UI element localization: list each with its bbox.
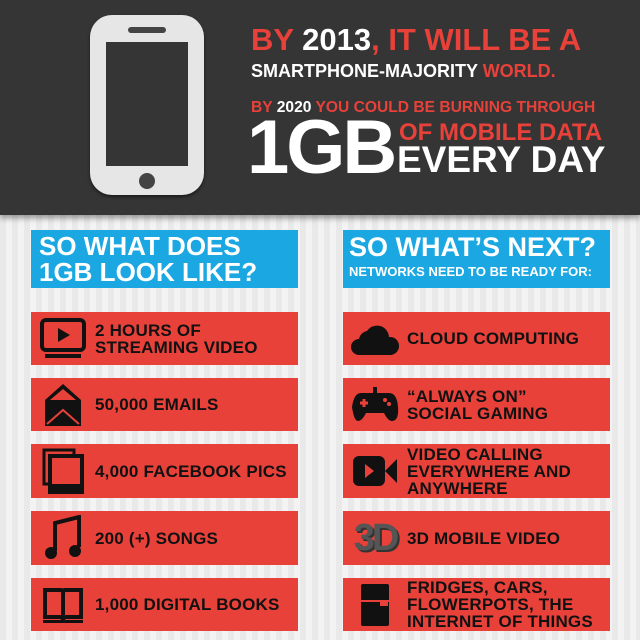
panel: right items: [343, 312, 610, 631]
item: internet of things: FRIDGES, CARS,: [407, 578, 548, 597]
item: pics: [31, 444, 298, 498]
item: video calling: EVERYWHERE AND: [407, 462, 571, 480]
item: video calling: ANYWHERE: [407, 478, 508, 498]
headline 2013: BY 2013, IT WILL BE A: [251, 22, 581, 57]
item: gaming: [343, 378, 610, 431]
item: 3D: [343, 511, 610, 565]
item: gaming: “ALWAYS ON”: [407, 386, 527, 406]
item: songs: [31, 511, 298, 565]
item: gaming: SOCIAL GAMING: [407, 404, 548, 422]
icon: smartphone: [90, 15, 204, 195]
item: emails: [31, 378, 298, 431]
panel header: left: SO WHAT DOES: [39, 231, 241, 261]
panel header: left: [31, 230, 298, 288]
item: emails: 50,000 EMAILS: [95, 395, 219, 414]
item: cloud: CLOUD COMPUTING: [407, 329, 579, 348]
header band: [0, 0, 640, 215]
item: video calling: VIDEO CALLING: [407, 444, 543, 464]
item: internet of things: [343, 578, 610, 631]
item: books: 1,000 DIGITAL BOOKS: [95, 595, 280, 614]
item: video: STREAMING VIDEO: [95, 338, 258, 356]
big 1GB: 1GB: [247, 105, 394, 190]
item: internet of things: FLOWERPOTS, THE: [407, 595, 573, 614]
panel: left items: [31, 312, 298, 631]
panel header: right: [343, 230, 610, 288]
item: pics: 4,000 FACEBOOK PICS: [95, 462, 287, 480]
item: cloud: [343, 312, 610, 365]
of mobile data: OF MOBILE DATA: [399, 119, 602, 146]
subline smartphone majority: SMARTPHONE-MAJORITY WORLD.: [251, 61, 556, 81]
panel header: right: SO WHAT’S NEXT?: [349, 232, 596, 262]
item: internet of things: INTERNET OF THINGS: [407, 612, 593, 631]
panel header: right: NETWORKS NEED TO BE READY FOR:: [349, 264, 592, 279]
panel header: left: 1GB LOOK LIKE?: [39, 257, 257, 287]
item: video calling: [343, 444, 610, 498]
item: books: [31, 578, 298, 631]
item: video: [31, 312, 298, 365]
line 2020: BY 2020 YOU COULD BE BURNING THROUGH: [251, 99, 595, 116]
item: 3D: 3D MOBILE VIDEO: [407, 528, 560, 548]
item: songs: 200 (+) SONGS: [95, 528, 218, 548]
item: 3D: 3D: [354, 516, 396, 558]
item: video: 2 HOURS OF: [95, 320, 201, 340]
every day: EVERY DAY: [397, 139, 605, 180]
